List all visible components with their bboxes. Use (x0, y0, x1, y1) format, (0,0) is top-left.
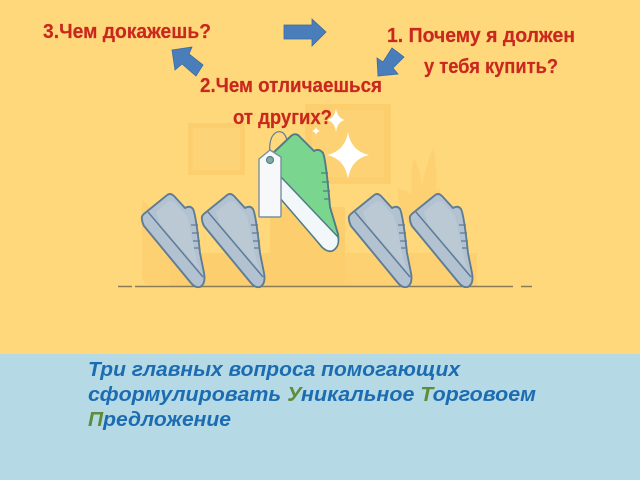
background (0, 0, 640, 354)
ground line (118, 286, 532, 288)
heading: question 2: 2.Чем отличаешься (200, 75, 382, 97)
heading: question 3: 3.Чем докажешь? (43, 21, 211, 43)
arrow: right (284, 19, 326, 46)
heading: question 1 (387, 25, 575, 78)
arrow: question 1 to question 2 (377, 48, 404, 76)
heading: question 2 (200, 75, 382, 129)
icon: grey shoe 3 (349, 194, 412, 287)
background furniture (142, 104, 477, 286)
icon: grey shoe 1 (142, 194, 204, 287)
icon: price tag (259, 132, 287, 217)
icon: grey shoe 2 (202, 194, 264, 287)
icon: grey shoe 4 (410, 194, 472, 287)
panel: caption background (0, 354, 640, 480)
icon: green shoe (272, 134, 338, 251)
text block: caption: сформулировать Уникальное Торговоем (88, 383, 536, 406)
heading: question 1: 1. Почему я должен (387, 25, 575, 47)
heading: question 1: у тебя купить? (424, 56, 558, 78)
text block: caption: Три главных вопроса помогающих (88, 358, 462, 381)
text block: caption (88, 358, 536, 431)
icon: sparkles (312, 108, 369, 179)
heading: question 2: от других? (233, 107, 332, 129)
arrow: question 2 to question 3 (172, 47, 203, 76)
text block: caption: Предложение (88, 408, 231, 431)
